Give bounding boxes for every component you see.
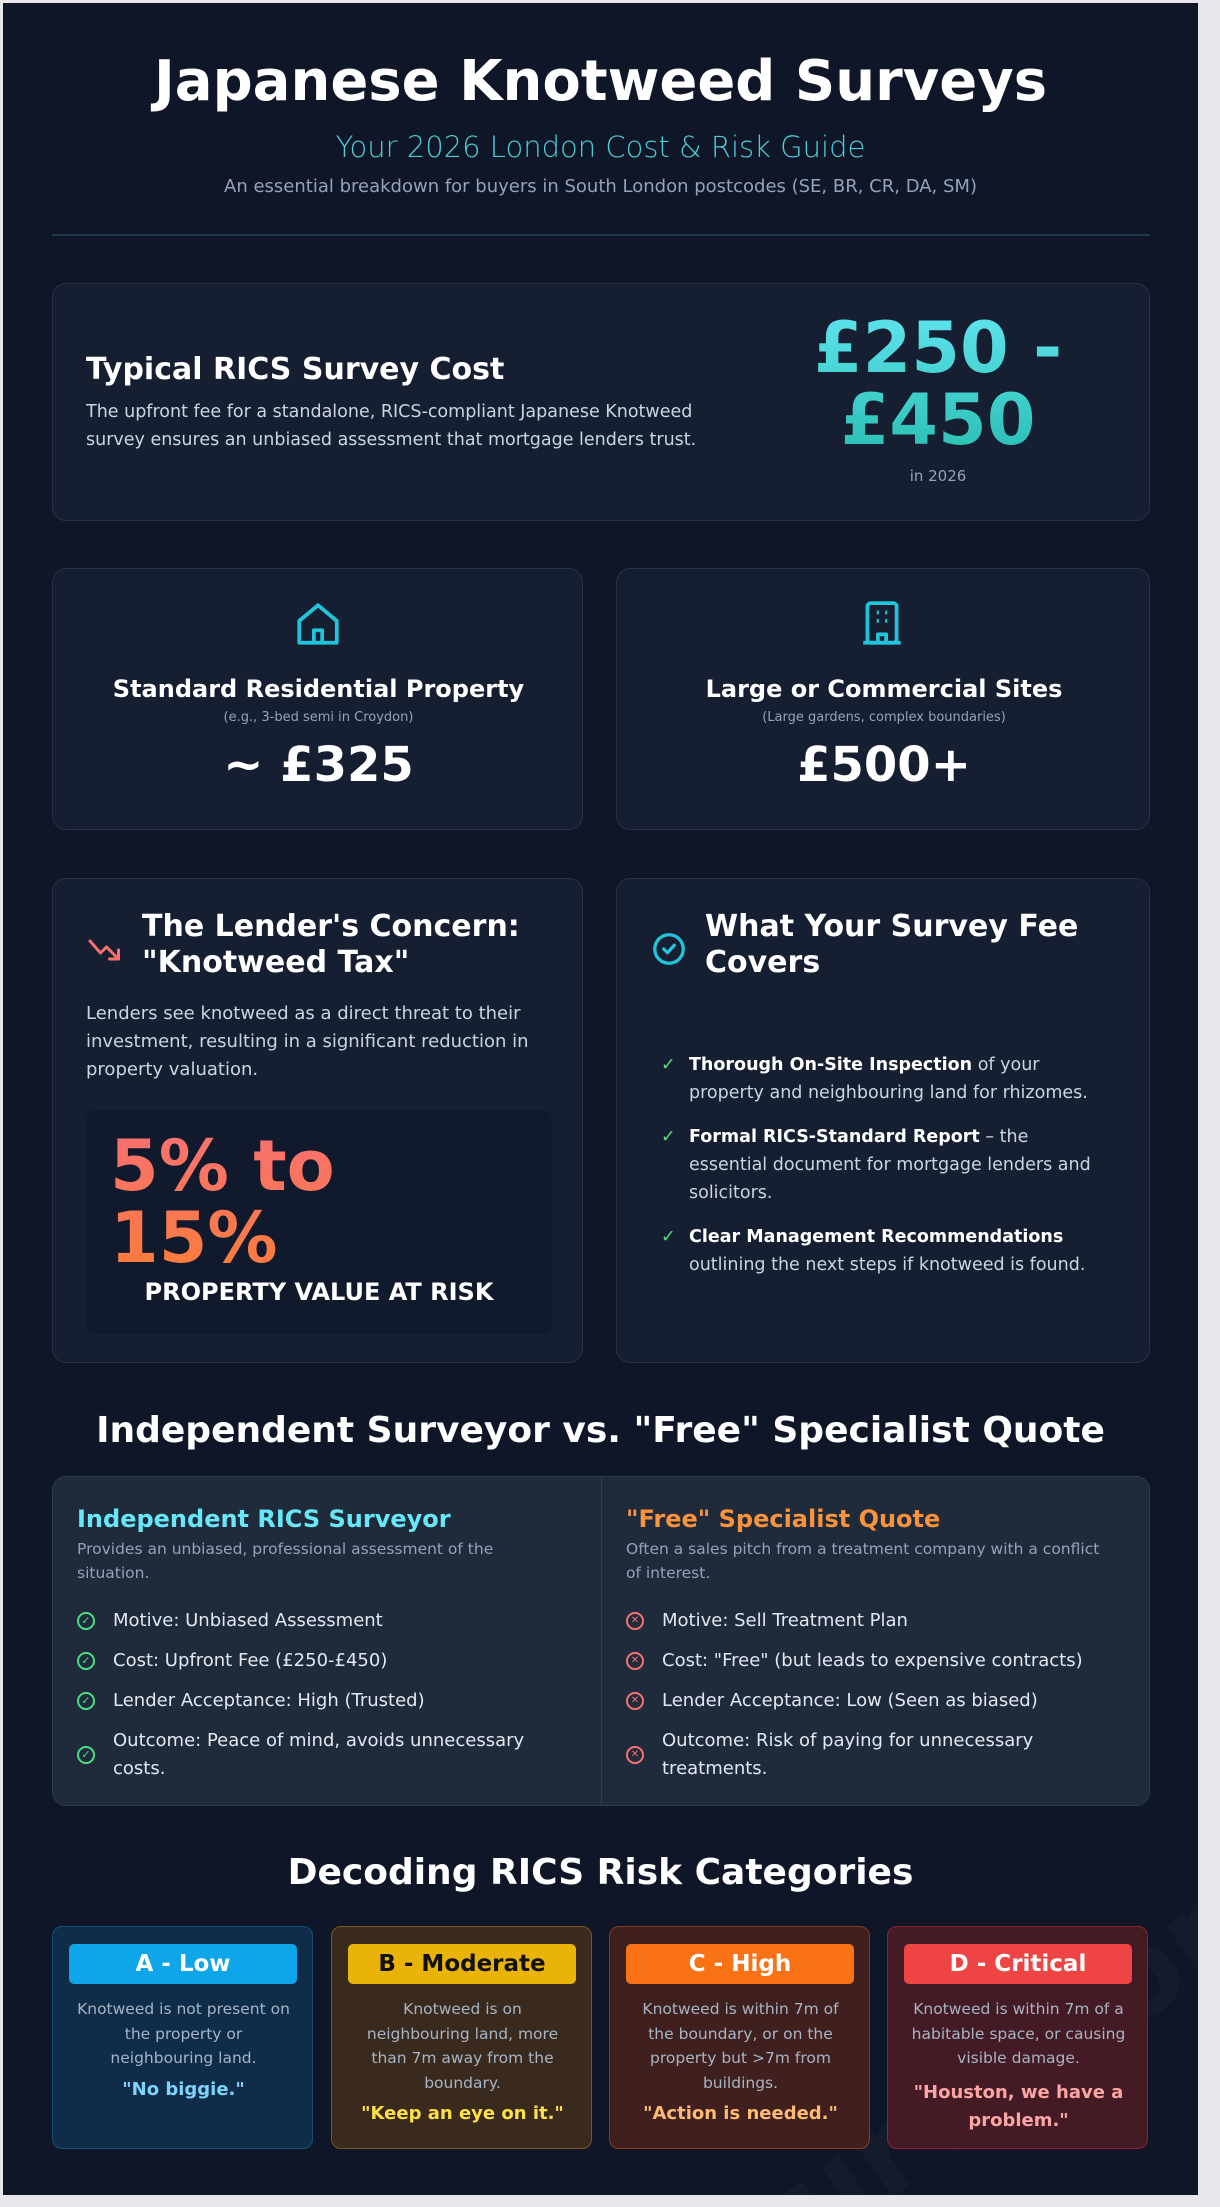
tagline: An essential breakdown for buyers in South London postcodes (SE, BR, CR, DA, SM)	[224, 176, 977, 197]
sub: (e.g., 3-bed semi in Croydon)	[224, 710, 413, 725]
heading: typical cost: Typical RICS Survey Cost	[86, 352, 504, 387]
badge: B - Moderate	[378, 1951, 546, 1977]
panel: comparison table: Outcome: Peace of mind, avoids unnecessary costs.	[113, 1730, 524, 1779]
badge: C - High	[689, 1951, 791, 1977]
item 2: Formal RICS-Standard Report – the essential document for mortgage lenders and solicitors.	[689, 1127, 1091, 1203]
text: Knotweed is within 7m of the boundary, or on the property but >7m from buildings.	[642, 2000, 839, 2092]
text: Knotweed is on neighbouring land, more than 7m away from the boundary.	[367, 2000, 558, 2092]
heading	[142, 909, 520, 980]
panel: comparison table: ✕	[631, 1749, 639, 1760]
stat label: PROPERTY VALUE AT RISK	[145, 1278, 493, 1306]
price range: £450	[841, 379, 1035, 461]
panel: what fee covers: ✓	[661, 1055, 676, 1075]
heading: "Free" Specialist Quote	[626, 1505, 940, 1533]
badge	[69, 1944, 297, 1984]
card: A low	[52, 1926, 313, 2149]
panel: comparison table: ✕	[631, 1615, 639, 1626]
icon: check circle	[653, 933, 685, 965]
stat number: 15%	[110, 1197, 278, 1279]
stat number	[110, 1130, 335, 1274]
panel: lender's concern	[52, 878, 583, 1363]
list: cons	[626, 1610, 1083, 1779]
icon: house	[297, 603, 339, 645]
panel: comparison table	[52, 1476, 1150, 1806]
heading: What Your Survey Fee	[705, 909, 1078, 944]
quote: "Keep an eye on it."	[361, 2103, 564, 2124]
price: ~ £325	[223, 737, 414, 793]
panel: typical RICS survey cost	[52, 283, 1150, 521]
icon: trending down	[88, 939, 120, 961]
icon: building	[863, 601, 901, 645]
panel: comparison table: Lender Acceptance: Low (Seen as biased)	[662, 1690, 1038, 1711]
heading: comparison: Independent Surveyor vs. "Free" Specialist Quote	[96, 1410, 1105, 1451]
panel: comparison table: ✕	[631, 1695, 639, 1706]
price range: £250 -	[814, 307, 1062, 389]
list	[661, 1055, 1091, 1275]
badge: A - Low	[135, 1951, 231, 1977]
item 1: Thorough On-Site Inspection of your property and neighbouring land for rhizomes.	[689, 1055, 1088, 1103]
heading: Covers	[705, 945, 820, 980]
heading: Independent RICS Surveyor	[77, 1505, 451, 1533]
heading: Standard Residential Property	[113, 675, 524, 703]
price range	[773, 312, 1103, 456]
item 3: Clear Management Recommendations outlining the next steps if knotweed is found.	[689, 1227, 1085, 1275]
heading: The Lender's Concern:	[142, 909, 520, 944]
quote: "Action is needed."	[643, 2103, 838, 2124]
card: D critical	[887, 1926, 1148, 2149]
panel: comparison table: ✓	[81, 1654, 91, 1667]
text: cost description: The upfront fee for a standalone, RICS-compliant Japanese Knotweed survey ensures an unbiased assessment that mortgage lenders trust.	[86, 402, 696, 450]
subtitle: Your 2026 London Cost & Risk Guide	[336, 130, 865, 164]
panel: large or commercial	[616, 568, 1150, 830]
sub: Often a sales pitch from a treatment company with a conflict of interest.	[626, 1540, 1099, 1582]
sub: Provides an unbiased, professional assessment of the situation.	[77, 1540, 493, 1582]
stat number: 5% to	[110, 1125, 335, 1207]
panel: what fee covers: ✓	[661, 1127, 676, 1147]
column: independent	[77, 1505, 524, 1779]
text: Lenders see knotweed as a direct threat to their investment, resulting in a significant reduction in property valuation.	[86, 1003, 529, 1080]
card: B moderate	[331, 1926, 592, 2149]
panel: comparison table: ✓	[81, 1748, 91, 1761]
panel: what fee covers: ✓	[661, 1227, 676, 1247]
badge	[348, 1944, 576, 1984]
panel: standard residential	[52, 568, 583, 830]
text: Knotweed is within 7m of a habitable space, or causing visible damage.	[912, 2000, 1125, 2067]
title: Japanese Knotweed Surveys	[154, 49, 1047, 114]
panel: comparison table: Motive: Unbiased Assessment	[113, 1610, 383, 1631]
panel: comparison table: Cost: "Free" (but leads to expensive contracts)	[662, 1650, 1083, 1671]
heading: risk categories: Decoding RICS Risk Categories	[288, 1852, 913, 1893]
heading: Large or Commercial Sites	[706, 675, 1062, 703]
quote: "No biggie."	[122, 2079, 245, 2100]
panel: comparison table: ✓	[81, 1614, 91, 1627]
caption: in 2026: in 2026	[910, 467, 966, 485]
sub: (Large gardens, complex boundaries)	[762, 710, 1006, 725]
panel: comparison table: ✓	[81, 1694, 91, 1707]
stat box	[86, 1110, 552, 1334]
text: Knotweed is not present on the property or neighbouring land.	[77, 2000, 290, 2067]
badge: D - Critical	[950, 1951, 1086, 1977]
price: £500+	[797, 737, 971, 793]
panel: what fee covers	[616, 878, 1150, 1363]
panel: comparison table: Outcome: Risk of paying for unnecessary treatments.	[662, 1730, 1033, 1779]
column: free quote	[626, 1505, 1099, 1779]
quote: "Houston, we have a problem."	[914, 2082, 1123, 2131]
list: pros	[77, 1610, 524, 1779]
badge	[904, 1944, 1132, 1984]
panel: comparison table: Cost: Upfront Fee (£250-£450)	[113, 1650, 387, 1671]
panel: comparison table: Motive: Sell Treatment Plan	[662, 1610, 908, 1631]
card: C high	[609, 1926, 870, 2149]
badge	[626, 1944, 854, 1984]
panel: comparison table: Lender Acceptance: High (Trusted)	[113, 1690, 425, 1711]
heading	[705, 909, 1078, 980]
panel: comparison table: ✕	[631, 1655, 639, 1666]
heading: "Knotweed Tax"	[142, 945, 409, 980]
